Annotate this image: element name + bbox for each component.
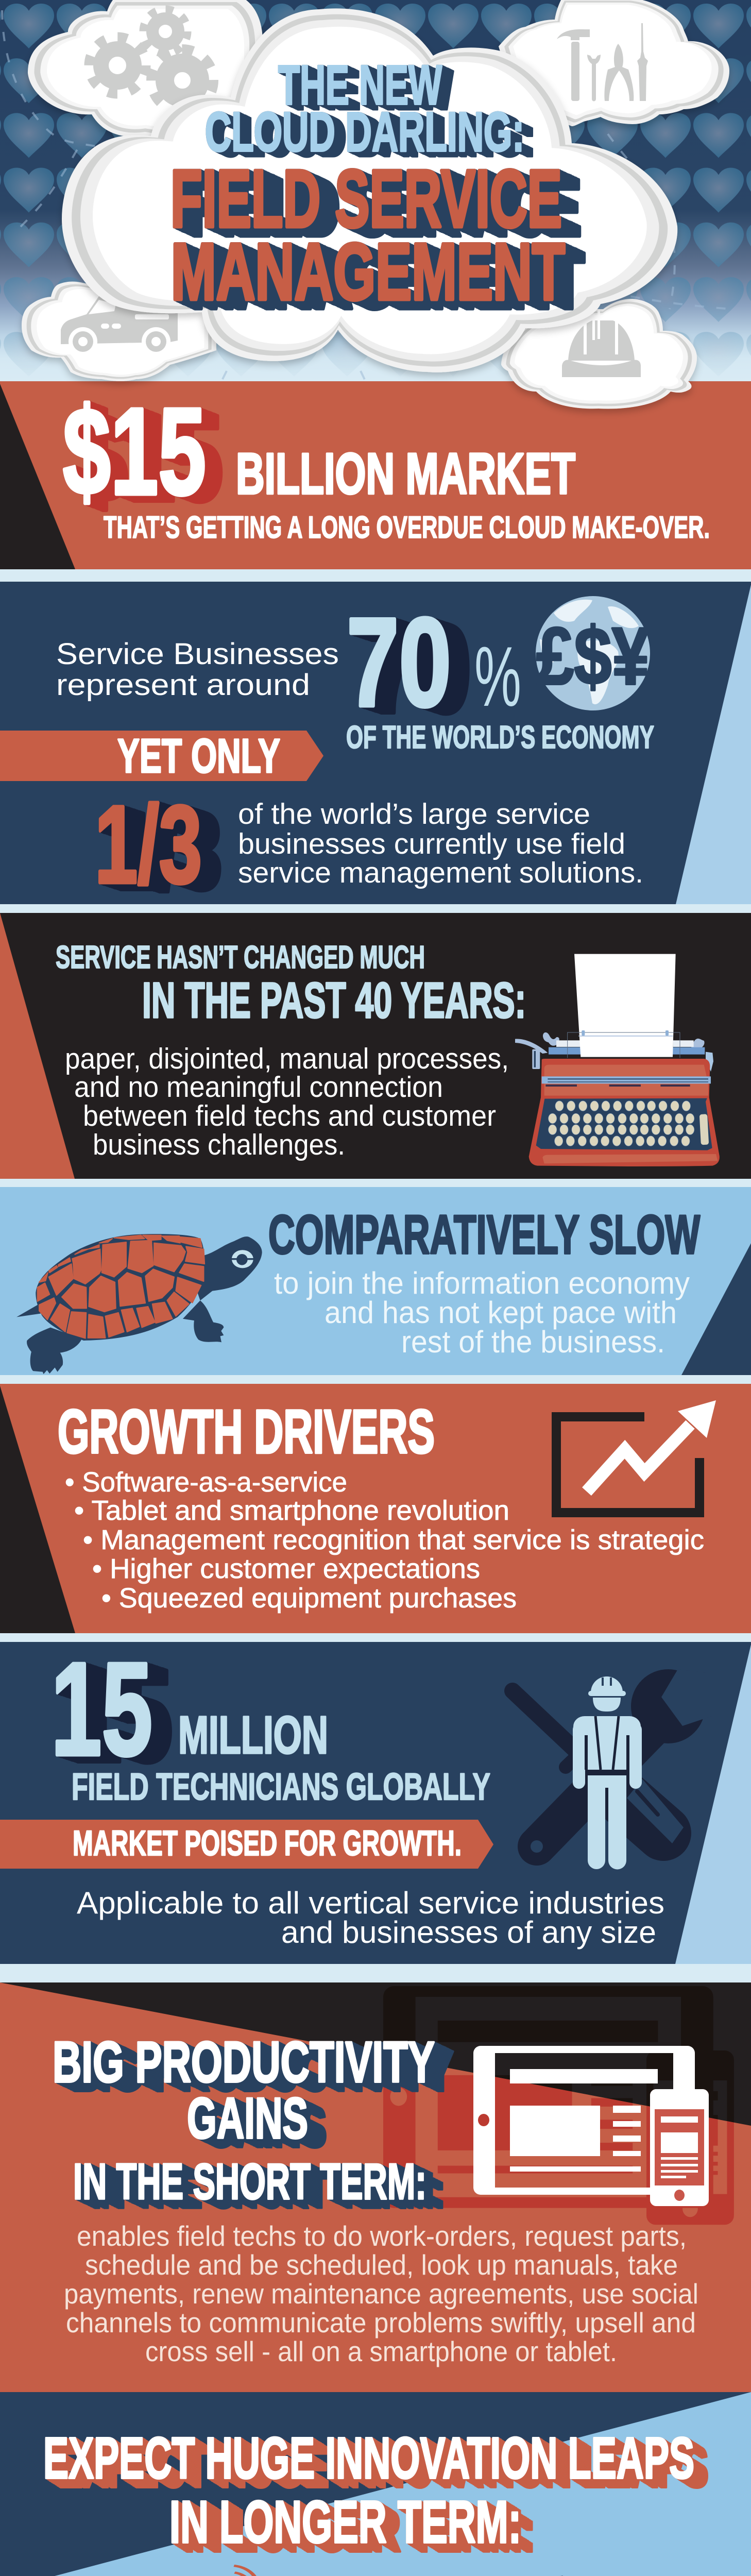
icon: globe with currency: £$¥ xyxy=(536,611,650,702)
bullet list: • Squeezed equipment purchases xyxy=(101,1583,517,1614)
percent sign: % xyxy=(474,629,521,724)
body text: cross sell - all on a smartphone or tablet. xyxy=(145,2335,617,2367)
body text xyxy=(65,1042,509,1161)
bullet list: • Higher customer expectations xyxy=(92,1553,480,1584)
heading: service hasn't changed much: SERVICE HASN’T CHANGED MUCH xyxy=(56,940,425,975)
icon: gears xyxy=(89,9,213,111)
icon: globe with currency xyxy=(536,596,650,710)
cloud: main xyxy=(62,8,677,372)
icon: tablet and phone xyxy=(473,2046,709,2206)
cloud: tools xyxy=(499,0,729,126)
text: world's large service businesses xyxy=(238,798,643,889)
icon: growth chart xyxy=(556,1400,716,1513)
body text xyxy=(77,1886,664,1950)
bullet list: • Tablet and smartphone revolution xyxy=(74,1495,509,1526)
arrow banner: market poised for growth: MARKET POISED FOR GROWTH. xyxy=(73,1823,462,1863)
icon: device shadow xyxy=(383,1986,734,2225)
body text: enables field techs to do work-orders, request parts, xyxy=(77,2220,687,2252)
body text: rest of the business. xyxy=(401,1325,665,1359)
bullet list: • Management recognition that service is strategic xyxy=(83,1524,704,1555)
panel: growth drivers xyxy=(0,1384,751,1633)
bullet list xyxy=(65,1467,704,1614)
heading: field technicians globally: FIELD TECHNICIANS GLOBALLY xyxy=(72,1766,490,1808)
arrow banner: market poised for growth xyxy=(0,1820,493,1869)
heading: gains: GAINS xyxy=(187,2086,308,2150)
cloud: gears xyxy=(28,0,263,155)
body text: Applicable to all vertical service industries xyxy=(77,1886,664,1920)
big number: 70: 70 xyxy=(347,591,451,733)
icon: tools xyxy=(557,23,648,101)
big number: one third: 1/3 xyxy=(95,783,202,906)
title line: management: MANAGEMENT xyxy=(171,227,565,317)
bullet list: • Software-as-a-service xyxy=(65,1467,347,1498)
body text: paper, disjointed, manual processes, xyxy=(65,1042,509,1075)
title xyxy=(170,54,565,317)
heading: million: MILLION xyxy=(178,1705,328,1765)
icon: turtle xyxy=(16,1234,262,1374)
heading: in longer term: IN LONGER TERM: xyxy=(169,2488,521,2555)
body text xyxy=(64,2220,698,2367)
panel: huge innovation leaps xyxy=(0,2392,751,2576)
panel: 15 billion market xyxy=(0,381,751,569)
body text xyxy=(274,1266,690,1359)
body text: to join the information economy xyxy=(274,1266,690,1300)
body text: schedule and be scheduled, look up manuals, take xyxy=(85,2249,678,2281)
icon: van xyxy=(61,289,178,356)
icon: connected washing machine xyxy=(136,2566,258,2576)
icon: hard hat xyxy=(562,309,641,377)
heading: big productivity: BIG PRODUCTIVITY xyxy=(53,2030,435,2094)
text: world's large service businesses: of the world’s large service xyxy=(238,798,590,831)
hero background with hearts xyxy=(0,0,751,392)
body text: and has not kept pace with xyxy=(325,1295,677,1330)
body text: and no meaningful connection xyxy=(74,1071,443,1104)
cloud: van xyxy=(22,282,216,381)
text: service businesses: Service Businesses xyxy=(56,637,339,671)
cloud: hard hat xyxy=(501,299,697,409)
text: service businesses: represent around xyxy=(56,668,310,702)
body text: between field techs and customer xyxy=(83,1099,496,1132)
body text: payments, renew maintenance agreements, use social xyxy=(64,2278,698,2310)
panel: comparatively slow xyxy=(0,1187,751,1375)
icon: technician with tools xyxy=(513,1669,719,1870)
big number: $15 xyxy=(63,382,206,520)
title line: cloud darling: CLOUD DARLING: xyxy=(205,100,524,163)
icon: engineer with smart glasses xyxy=(499,2575,602,2576)
panel: 70 percent of economy xyxy=(0,582,751,906)
panel: 15 million technicians xyxy=(0,1635,751,1964)
body text: business challenges. xyxy=(93,1128,345,1161)
text: service businesses xyxy=(56,637,339,702)
heading: growth drivers: GROWTH DRIVERS xyxy=(58,1397,435,1466)
big number: 15: 15 xyxy=(51,1635,152,1783)
panel: big productivity gains xyxy=(0,1982,751,2392)
title line: the new: THE NEW xyxy=(278,54,442,116)
text: world's large service businesses: service management solutions. xyxy=(238,856,643,889)
icon: typewriter xyxy=(515,954,720,1166)
body text: channels to communicate problems swiftly, upsell and xyxy=(66,2307,696,2338)
heading: in the short term: IN THE SHORT TERM: xyxy=(73,2153,426,2210)
heading: in the past 40 years: IN THE PAST 40 YEARS: xyxy=(142,972,526,1028)
panel: service hasn't changed xyxy=(0,913,751,1179)
arrow banner: yet only: YET ONLY xyxy=(117,729,280,783)
body text: and businesses of any size xyxy=(281,1915,656,1950)
heading: billion market: BILLION MARKET xyxy=(236,442,575,506)
arrow banner: yet only xyxy=(0,729,323,783)
text: world's large service businesses: businesses currently use field xyxy=(238,827,625,860)
